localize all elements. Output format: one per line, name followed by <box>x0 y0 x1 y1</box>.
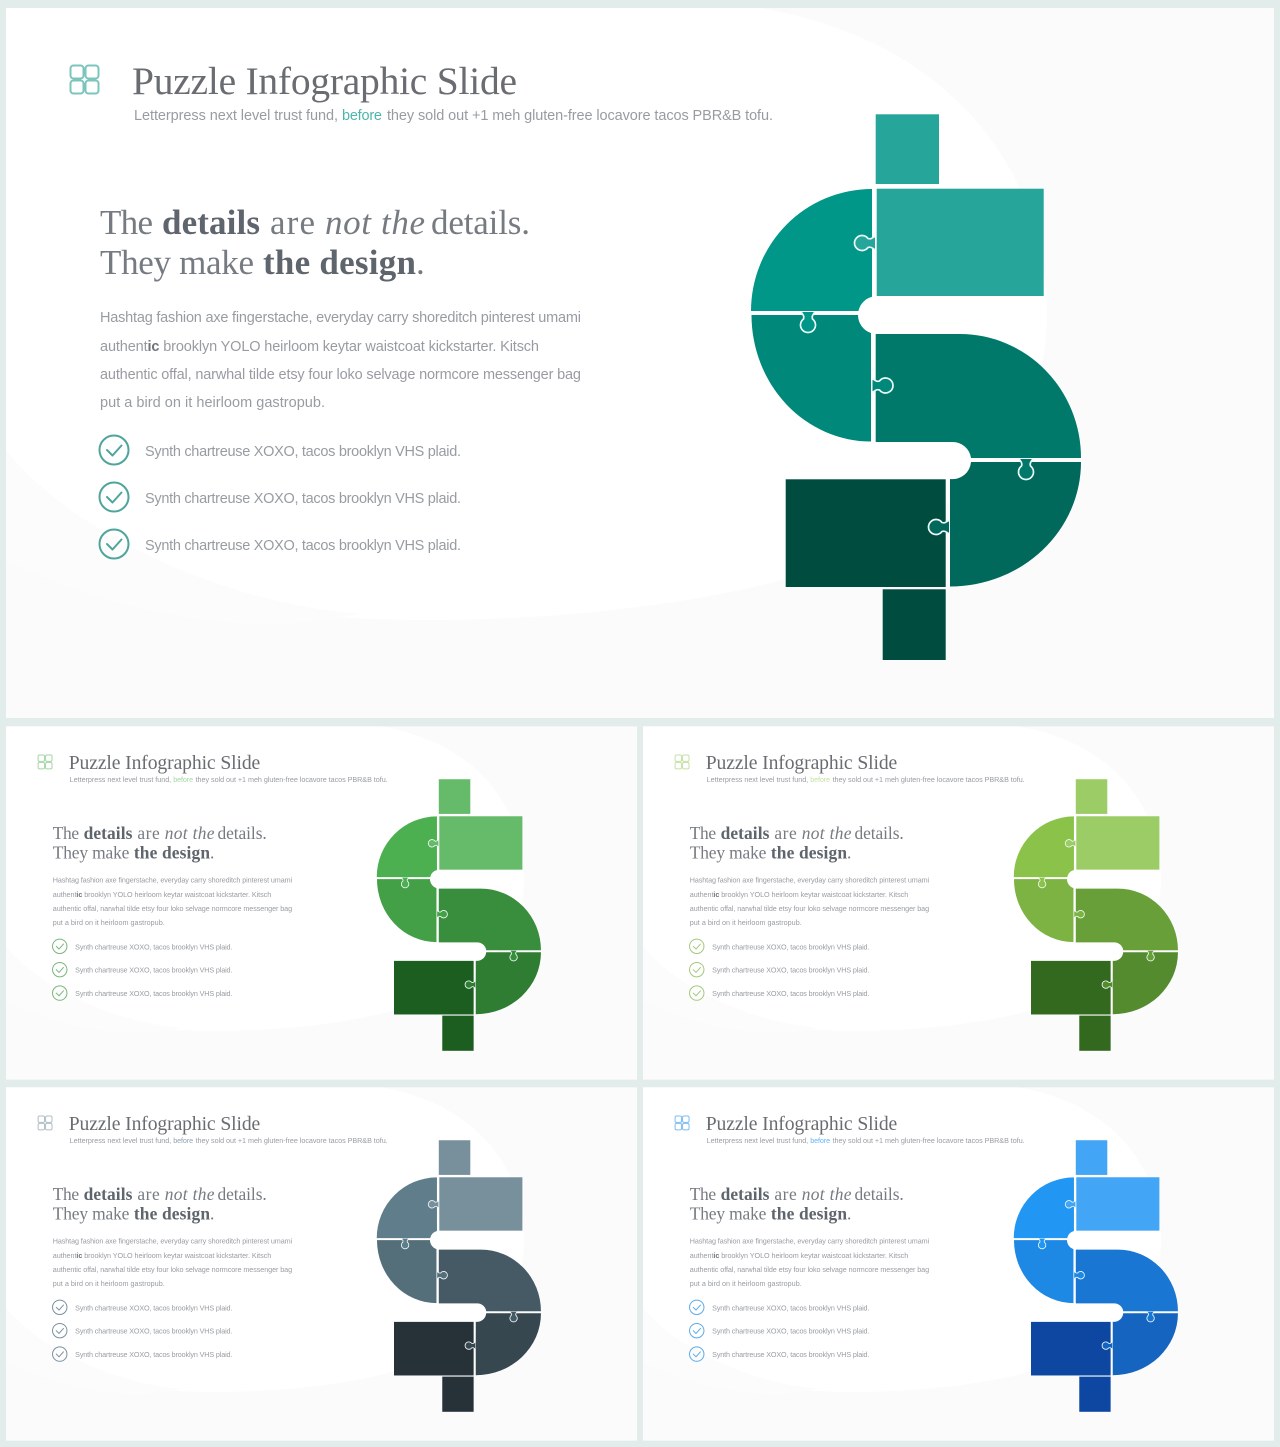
headline: . <box>210 1204 214 1224</box>
body text: authentic offal, narwhal tilde etsy four loko selvage normcore messenger bag <box>690 1265 929 1274</box>
dollar puzzle <box>1014 1140 1178 1412</box>
body text: Hashtag fashion axe fingerstache, everyday carry shoreditch pinterest umami <box>53 876 293 885</box>
headline: are <box>137 1184 160 1204</box>
body text: put a bird on it heirloom gastropub. <box>690 918 802 927</box>
headline: not the <box>802 1184 852 1204</box>
checklist: Synth chartreuse XOXO, tacos brooklyn VHS plaid. <box>145 444 461 460</box>
checklist: Synth chartreuse XOXO, tacos brooklyn VHS plaid. <box>75 942 232 951</box>
title: Puzzle Infographic Slide <box>132 59 517 103</box>
headline: details <box>721 823 770 843</box>
checklist <box>690 939 869 1000</box>
subtitle: Letterpress next level trust fund, <box>70 775 171 784</box>
icon: grid <box>675 755 689 769</box>
body text <box>100 310 581 411</box>
headline: They make <box>690 843 767 863</box>
panel: light green slide <box>643 726 1274 1080</box>
headline: details. <box>854 823 904 843</box>
subtitle: Letterpress next level trust fund, <box>70 1136 171 1145</box>
panel: green slide <box>6 726 637 1080</box>
subtitle: before <box>810 1136 830 1145</box>
subtitle: they sold out +1 meh gluten-free locavore tacos PBR&B tofu. <box>833 775 1025 784</box>
subtitle: they sold out +1 meh gluten-free locavore tacos PBR&B tofu. <box>196 775 388 784</box>
checklist: Synth chartreuse XOXO, tacos brooklyn VHS plaid. <box>712 1350 869 1359</box>
icon: grid <box>675 1116 689 1130</box>
panel: blue grey slide <box>6 1087 637 1440</box>
checklist: Synth chartreuse XOXO, tacos brooklyn VHS plaid. <box>75 989 232 998</box>
headline: details <box>84 1184 133 1204</box>
subtitle: they sold out +1 meh gluten-free locavore tacos PBR&B tofu. <box>833 1136 1025 1145</box>
headline: not the <box>165 1184 215 1204</box>
body text: Hashtag fashion axe fingerstache, everyday carry shoreditch pinterest umami <box>690 876 930 885</box>
headline: the design <box>263 243 416 282</box>
checklist: Synth chartreuse XOXO, tacos brooklyn VHS plaid. <box>75 966 232 975</box>
title: Puzzle Infographic Slide <box>69 1113 261 1135</box>
headline: the design <box>771 843 847 863</box>
body text: put a bird on it heirloom gastropub. <box>53 918 165 927</box>
body text <box>53 1237 293 1288</box>
body text <box>690 1237 930 1288</box>
body text: authentic brooklyn YOLO heirloom keytar waistcoat kickstarter. Kitsch <box>53 1251 271 1260</box>
checklist: Synth chartreuse XOXO, tacos brooklyn VHS plaid. <box>75 1350 232 1359</box>
headline: not the <box>165 823 215 843</box>
headline: details <box>721 1184 770 1204</box>
body text: put a bird on it heirloom gastropub. <box>100 395 325 411</box>
dollar puzzle <box>1014 779 1178 1051</box>
headline: They make <box>100 243 254 282</box>
checklist: Synth chartreuse XOXO, tacos brooklyn VHS plaid. <box>145 538 461 554</box>
body text: authentic brooklyn YOLO heirloom keytar waistcoat kickstarter. Kitsch <box>100 339 539 355</box>
headline: They make <box>690 1204 767 1224</box>
headline: are <box>270 203 315 242</box>
headline: The <box>100 203 153 242</box>
headline: the design <box>134 1204 210 1224</box>
body text: authentic offal, narwhal tilde etsy four loko selvage normcore messenger bag <box>53 1265 292 1274</box>
checklist <box>690 1300 869 1361</box>
dollar puzzle <box>377 1140 541 1412</box>
panel: teal slide <box>6 8 1274 718</box>
body text: authentic offal, narwhal tilde etsy four loko selvage normcore messenger bag <box>690 904 929 913</box>
body text: Hashtag fashion axe fingerstache, everyday carry shoreditch pinterest umami <box>100 310 581 326</box>
dollar puzzle <box>751 114 1081 660</box>
checklist: Synth chartreuse XOXO, tacos brooklyn VHS plaid. <box>712 966 869 975</box>
checklist: Synth chartreuse XOXO, tacos brooklyn VHS plaid. <box>712 942 869 951</box>
headline: not the <box>325 203 425 242</box>
headline: . <box>847 843 851 863</box>
icon: grid <box>38 1116 52 1130</box>
body text: authentic offal, narwhal tilde etsy four loko selvage normcore messenger bag <box>53 904 292 913</box>
checklist: Synth chartreuse XOXO, tacos brooklyn VHS plaid. <box>145 491 461 507</box>
checklist: Synth chartreuse XOXO, tacos brooklyn VHS plaid. <box>712 1327 869 1336</box>
checklist <box>53 939 232 1000</box>
headline: details. <box>854 1184 904 1204</box>
subtitle: before <box>173 1136 193 1145</box>
headline: . <box>847 1204 851 1224</box>
subtitle: they sold out +1 meh gluten-free locavore tacos PBR&B tofu. <box>387 108 773 124</box>
checklist: Synth chartreuse XOXO, tacos brooklyn VHS plaid. <box>712 989 869 998</box>
headline: the design <box>134 843 210 863</box>
subtitle: before <box>173 775 193 784</box>
subtitle: before <box>810 775 830 784</box>
headline: The <box>53 1184 79 1204</box>
headline: They make <box>53 1204 130 1224</box>
title: Puzzle Infographic Slide <box>706 1113 898 1135</box>
checklist <box>53 1300 232 1361</box>
body text <box>53 876 293 927</box>
body text: authentic offal, narwhal tilde etsy four loko selvage normcore messenger bag <box>100 367 581 383</box>
headline: details <box>84 823 133 843</box>
headline: are <box>774 823 797 843</box>
body text <box>690 876 930 927</box>
headline: They make <box>53 843 130 863</box>
subtitle: Letterpress next level trust fund, <box>707 775 808 784</box>
checklist: Synth chartreuse XOXO, tacos brooklyn VHS plaid. <box>75 1303 232 1312</box>
panel: blue slide <box>643 1087 1274 1440</box>
headline: details. <box>217 823 267 843</box>
headline: are <box>774 1184 797 1204</box>
icon: grid <box>70 66 98 94</box>
body text: put a bird on it heirloom gastropub. <box>690 1279 802 1288</box>
headline: . <box>416 243 425 282</box>
body text: Hashtag fashion axe fingerstache, everyday carry shoreditch pinterest umami <box>53 1237 293 1246</box>
icon: grid <box>38 755 52 769</box>
subtitle: they sold out +1 meh gluten-free locavore tacos PBR&B tofu. <box>196 1136 388 1145</box>
body text: authentic brooklyn YOLO heirloom keytar waistcoat kickstarter. Kitsch <box>53 890 271 899</box>
body text: authentic brooklyn YOLO heirloom keytar waistcoat kickstarter. Kitsch <box>690 890 908 899</box>
checklist: Synth chartreuse XOXO, tacos brooklyn VHS plaid. <box>712 1303 869 1312</box>
title: Puzzle Infographic Slide <box>69 752 261 774</box>
headline: details. <box>217 1184 267 1204</box>
headline: the design <box>771 1204 847 1224</box>
body text: Hashtag fashion axe fingerstache, everyday carry shoreditch pinterest umami <box>690 1237 930 1246</box>
headline: The <box>690 823 716 843</box>
subtitle: before <box>342 108 382 124</box>
body text: put a bird on it heirloom gastropub. <box>53 1279 165 1288</box>
headline: not the <box>802 823 852 843</box>
headline: details <box>162 203 260 242</box>
checklist <box>100 436 461 558</box>
headline: The <box>53 823 79 843</box>
headline: are <box>137 823 160 843</box>
title: Puzzle Infographic Slide <box>706 752 898 774</box>
headline: The <box>690 1184 716 1204</box>
subtitle: Letterpress next level trust fund, <box>134 108 338 124</box>
checklist: Synth chartreuse XOXO, tacos brooklyn VHS plaid. <box>75 1327 232 1336</box>
body text: authentic brooklyn YOLO heirloom keytar waistcoat kickstarter. Kitsch <box>690 1251 908 1260</box>
subtitle: Letterpress next level trust fund, <box>707 1136 808 1145</box>
headline: . <box>210 843 214 863</box>
dollar puzzle <box>377 779 541 1051</box>
headline: details. <box>431 203 530 242</box>
